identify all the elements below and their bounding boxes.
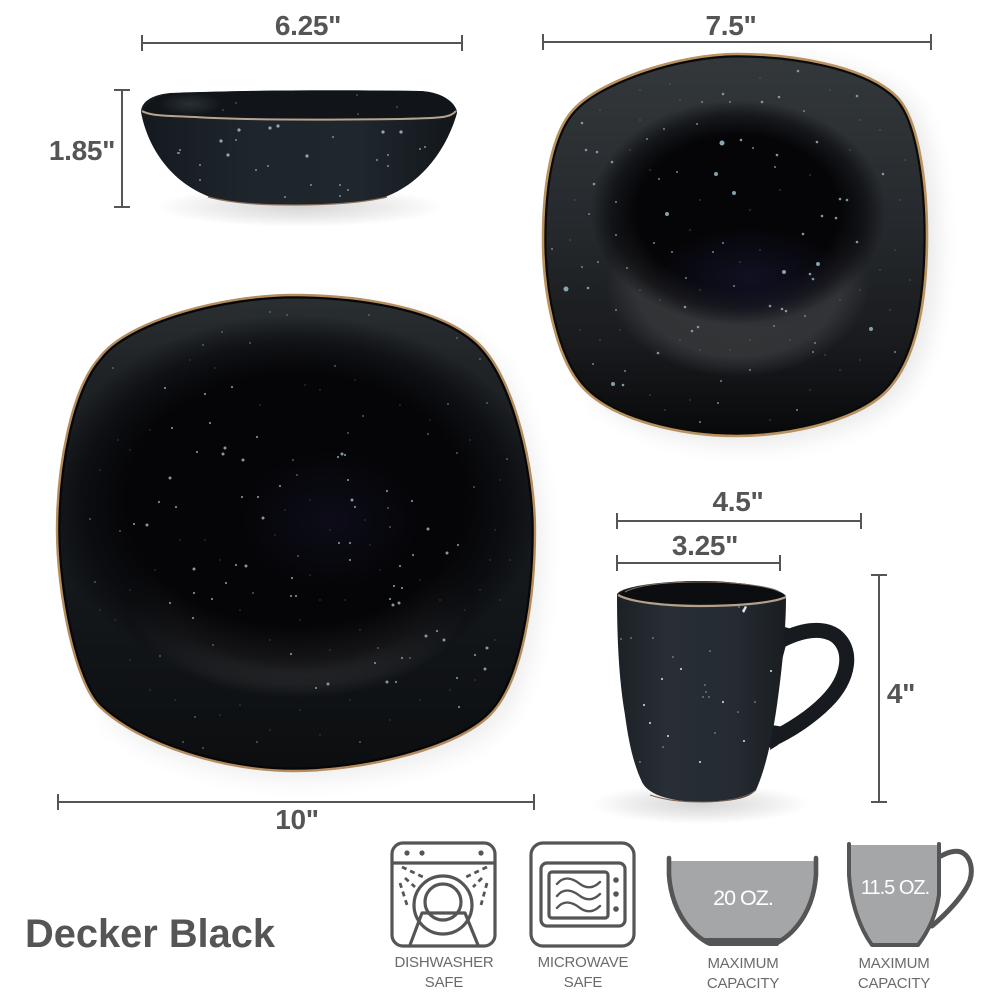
dimension: mug width with handle 4.5 inches	[617, 486, 861, 529]
dimension: mug width 3.25 inches: 3.25"	[672, 530, 738, 561]
mug body	[617, 581, 786, 802]
dimension: salad plate width 7.5 inches: 7.5"	[706, 10, 756, 41]
mug photo	[590, 581, 847, 824]
dimension: mug width 3.25 inches	[617, 530, 780, 571]
dimension: dinner plate width 10 inches: 10"	[275, 804, 319, 835]
icon: dishwasher safe	[392, 843, 495, 991]
label: maximum capacity: CAPACITY	[858, 975, 930, 992]
dimension: salad plate width 7.5 inches	[543, 10, 931, 50]
salad plate photo	[543, 54, 937, 444]
label: maximum capacity: MAXIMUM	[858, 955, 930, 972]
dimension: dinner plate width 10 inches	[58, 794, 534, 835]
label: maximum capacity: MAXIMUM	[707, 955, 779, 972]
label: dishwasher safe: SAFE	[425, 974, 463, 991]
label: microwave safe: SAFE	[564, 974, 602, 991]
dimension: mug width with handle 4.5 inches: 4.5"	[712, 486, 764, 517]
icon: microwave safe	[531, 843, 634, 991]
icon: mug capacity 11.5 oz: 11.5 OZ.	[861, 877, 929, 899]
label: dishwasher safe: DISHWASHER	[394, 954, 494, 971]
title: Decker Black: Decker Black	[25, 912, 276, 956]
mug handle	[770, 625, 847, 750]
dimension: bowl width 6.25 inches	[142, 10, 462, 51]
icon: bowl capacity 20 oz	[669, 858, 816, 992]
dimension: mug height 4 inches	[871, 575, 915, 802]
icon: bowl capacity 20 oz: 20 OZ.	[713, 886, 773, 910]
dimension: bowl width 6.25 inches: 6.25"	[275, 10, 341, 41]
dimension: bowl height 1.85 inches	[49, 90, 130, 207]
dinner plate photo	[45, 295, 545, 779]
dimension: mug height 4 inches: 4"	[887, 678, 915, 709]
icon: mug capacity 11.5 oz	[849, 844, 971, 992]
dimension: bowl height 1.85 inches: 1.85"	[49, 135, 115, 166]
bowl photo	[141, 90, 457, 227]
label: microwave safe: MICROWAVE	[538, 954, 629, 971]
label: maximum capacity: CAPACITY	[707, 975, 779, 992]
